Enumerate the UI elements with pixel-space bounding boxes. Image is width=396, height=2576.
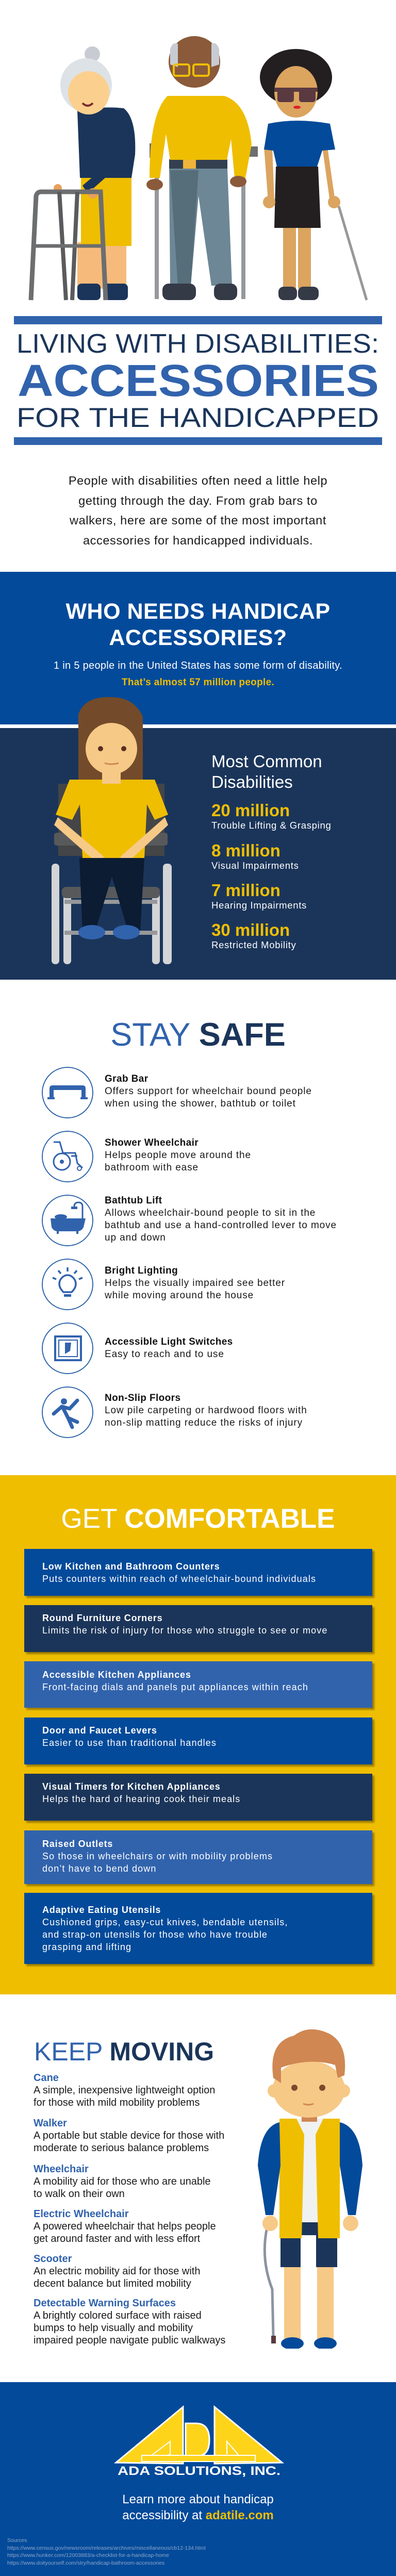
item: scooter: decent balance but limited mobility <box>34 2278 191 2289</box>
stay safe item: grab bar: Grab Bar <box>105 1074 148 1084</box>
intro paragraph: walkers, here are some of the most important <box>70 514 326 527</box>
box: kitchen appliances <box>24 1661 372 1708</box>
item: detectable warning surfaces: Detectable Warning Surfaces <box>34 2298 176 2309</box>
title block: FOR THE HANDICAPPED <box>16 403 379 433</box>
text: low counters <box>42 1561 316 1584</box>
icon: grab bar <box>42 1067 93 1118</box>
illustration: boy with cane <box>258 2029 362 2349</box>
icon: bright lighting <box>42 1259 93 1310</box>
text: kitchen appliances: Accessible Kitchen Appliances <box>42 1670 191 1680</box>
text: levers <box>42 1725 217 1748</box>
box: levers <box>24 1718 372 1764</box>
stay safe item: bright lighting <box>105 1265 285 1301</box>
stat text: 1 in 5 people in the United States has some form of disability. <box>54 660 342 671</box>
intro paragraph: accessories for handicapped individuals. <box>83 534 313 547</box>
text: visual timers: Visual Timers for Kitchen Appliances <box>42 1781 221 1792</box>
text: visual timers <box>42 1781 240 1804</box>
item: scooter: Scooter <box>34 2253 72 2265</box>
heading: ACCESSORIES? <box>109 625 287 650</box>
title block: ACCESSORIES <box>18 356 379 406</box>
logo: ADA solutions <box>114 2405 284 2478</box>
icon: shower wheelchair <box>42 1131 93 1182</box>
icon: accessible light switch <box>42 1323 93 1374</box>
item: scooter: An electric mobility aid for those with <box>34 2266 200 2277</box>
item: walker: moderate to serious balance problems <box>34 2142 209 2154</box>
stay safe item: bathtub lift <box>105 1195 337 1243</box>
title block <box>14 316 382 445</box>
heading: WHO NEEDS HANDICAP <box>65 599 331 624</box>
text: eating utensils: grasping and lifting <box>42 1942 131 1952</box>
person: man with crutches <box>146 36 258 300</box>
stat text: That’s almost 57 million people. <box>122 677 274 688</box>
text: raised outlets: So those in wheelchairs or with mobility problems <box>42 1851 273 1861</box>
stay safe item: shower wheelchair <box>105 1137 251 1173</box>
illustration: three people with mobility aids <box>29 36 368 301</box>
stay safe item: bathtub lift: up and down <box>105 1232 166 1243</box>
item: wheelchair: to walk on their own <box>34 2188 125 2200</box>
subheading: most common disabilities: Most Common <box>211 752 322 771</box>
box: round corners <box>24 1605 372 1652</box>
title block: LIVING WITH DISABILITIES: <box>16 329 379 359</box>
item: scooter <box>34 2253 200 2289</box>
text: visual timers: Helps the hard of hearing cook their meals <box>42 1794 240 1804</box>
intro paragraph: People with disabilities often need a little help <box>69 474 327 487</box>
stay safe item: light switches: Accessible Light Switches <box>105 1336 233 1347</box>
sources <box>7 2537 206 2566</box>
item: detectable warning surfaces: A brightly colored surface with raised <box>34 2310 202 2321</box>
stat: 8 million: 8 million <box>211 841 280 860</box>
stat: 30 million: 30 million <box>211 920 290 939</box>
stat: 8 million: Visual Impairments <box>211 860 299 871</box>
illustration: girl in wheelchair <box>52 697 172 964</box>
stat: 7 million: 7 million <box>211 881 280 900</box>
text: eating utensils: Cushioned grips, easy-cut knives, bendable utensils, <box>42 1917 288 1927</box>
box: eating utensils <box>24 1893 372 1964</box>
stay safe item: shower wheelchair: Shower Wheelchair <box>105 1137 199 1148</box>
subheading: most common disabilities: Disabilities <box>211 772 293 791</box>
heading: get comfortable: GET COMFORTABLE <box>61 1504 335 1534</box>
stat text <box>54 660 342 688</box>
subheading: most common disabilities <box>211 752 322 791</box>
stay safe item: shower wheelchair: Helps people move around the <box>105 1150 251 1161</box>
call to action <box>122 2492 274 2522</box>
disabilities stats list <box>211 752 331 950</box>
stay safe item: light switches <box>105 1336 233 1360</box>
panel: most common disabilities <box>0 728 396 980</box>
text: levers: Easier to use than traditional handles <box>42 1738 217 1748</box>
text: eating utensils: and strap-on utensils for those who have trouble <box>42 1929 268 1940</box>
stay safe item: bathtub lift: Bathtub Lift <box>105 1195 162 1206</box>
item: electric wheelchair: Electric Wheelchair <box>34 2208 129 2220</box>
stay safe item: non-slip floors: non-slip matting reduce the risks of injury <box>105 1417 303 1428</box>
item: detectable warning surfaces <box>34 2298 225 2346</box>
stay safe item: light switches: Easy to reach and to use <box>105 1349 224 1360</box>
item: cane: for those with mild mobility problems <box>34 2097 200 2108</box>
sources: https://www.census.gov/newsroom/releases/archives/miscellaneous/cb12-134.html <box>7 2545 206 2551</box>
item: walker <box>34 2118 224 2154</box>
sources: Sources <box>7 2537 27 2544</box>
text: raised outlets: don’t have to bend down <box>42 1863 156 1874</box>
text: eating utensils: Adaptive Eating Utensils <box>42 1905 161 1915</box>
stat: 7 million: Hearing Impairments <box>211 900 307 911</box>
item: walker: Walker <box>34 2118 67 2129</box>
footer panel <box>0 2382 396 2576</box>
sources: https://www.doityourself.com/stry/handicap-bathroom-accessories <box>7 2560 164 2566</box>
stay safe item: non-slip floors <box>105 1393 307 1428</box>
icon: bathtub lift <box>42 1195 93 1246</box>
text: round corners: Limits the risk of injury for those who struggle to see or move <box>42 1625 328 1636</box>
stay safe item: bathtub lift: Allows wheelchair-bound people to sit in the <box>105 1208 316 1218</box>
heading: keep moving: KEEP MOVING <box>34 2037 214 2066</box>
icon: non-slip floors <box>42 1387 93 1438</box>
stat: 20 million <box>211 801 331 831</box>
stay safe item: non-slip floors: Low pile carpeting or hardwood floors with <box>105 1405 307 1416</box>
item: cane: A simple, inexpensive lightweight option <box>34 2085 215 2096</box>
box: raised outlets <box>24 1830 372 1884</box>
item: electric wheelchair: get around faster and with less effort <box>34 2233 200 2244</box>
text: kitchen appliances: Front-facing dials and panels put appliances within reach <box>42 1682 308 1692</box>
text: low counters: Puts counters within reach of wheelchair-bound individuals <box>42 1574 316 1584</box>
stat: 8 million <box>211 841 299 871</box>
text: low counters: Low Kitchen and Bathroom Counters <box>42 1561 220 1572</box>
call to action: accessibility at adatile.com <box>122 2508 274 2522</box>
box: visual timers <box>24 1774 372 1821</box>
panel: get comfortable <box>0 1475 396 1994</box>
item: cane <box>34 2072 215 2108</box>
heading: stay safe: STAY SAFE <box>110 1017 286 1053</box>
stay safe item: bright lighting: Bright Lighting <box>105 1265 178 1276</box>
stat: 20 million: 20 million <box>211 801 290 820</box>
item: walker: A portable but stable device for those with <box>34 2130 224 2141</box>
item: wheelchair: A mobility aid for those who are unable <box>34 2176 211 2187</box>
panel: who needs handicap accessories <box>0 572 396 724</box>
stay safe item: shower wheelchair: bathroom with ease <box>105 1162 199 1173</box>
person: woman with white cane <box>260 49 367 300</box>
item: wheelchair: Wheelchair <box>34 2164 89 2175</box>
intro paragraph <box>69 474 327 547</box>
item: cane: Cane <box>34 2072 59 2084</box>
stay safe item: bright lighting: Helps the visually impaired see better <box>105 1278 285 1289</box>
item: wheelchair <box>34 2164 211 2200</box>
item: electric wheelchair: A powered wheelchair that helps people <box>34 2221 216 2232</box>
sources: https://www.hunker.com/12003883/a-checklist-for-a-handicap-home <box>7 2552 169 2558</box>
stay safe item: bright lighting: while moving around the house <box>105 1290 254 1301</box>
text: round corners: Round Furniture Corners <box>42 1613 162 1623</box>
heading <box>65 599 331 650</box>
call to action: Learn more about handicap <box>122 2492 274 2506</box>
text: eating utensils <box>42 1905 288 1952</box>
text: raised outlets <box>42 1839 273 1874</box>
person: elderly woman with walker <box>31 46 135 300</box>
text: kitchen appliances <box>42 1670 308 1692</box>
stat: 20 million: Trouble Lifting & Grasping <box>211 820 331 831</box>
stay safe item: grab bar: Offers support for wheelchair bound people <box>105 1086 312 1097</box>
text: raised outlets: Raised Outlets <box>42 1839 113 1849</box>
text: round corners <box>42 1613 328 1636</box>
item: detectable warning surfaces: impaired people navigate public walkways <box>34 2335 225 2346</box>
text: levers: Door and Faucet Levers <box>42 1725 157 1736</box>
item: detectable warning surfaces: bumps to help visually and mobility <box>34 2322 193 2334</box>
stay safe item: grab bar: when using the shower, bathtub or toilet <box>105 1098 296 1109</box>
stat: 7 million <box>211 881 307 911</box>
stat: 30 million: Restricted Mobility <box>211 939 296 950</box>
stat: 30 million <box>211 920 296 950</box>
stay safe item: bathtub lift: bathtub and use a hand-controlled lever to move <box>105 1220 337 1231</box>
icons: stay safe circles <box>42 1067 93 1438</box>
item: electric wheelchair <box>34 2208 216 2244</box>
stay safe item: grab bar <box>105 1074 312 1109</box>
stay safe item: non-slip floors: Non-Slip Floors <box>105 1393 180 1403</box>
box: low counters <box>24 1549 372 1596</box>
intro paragraph: getting through the day. From grab bars to <box>78 494 318 507</box>
